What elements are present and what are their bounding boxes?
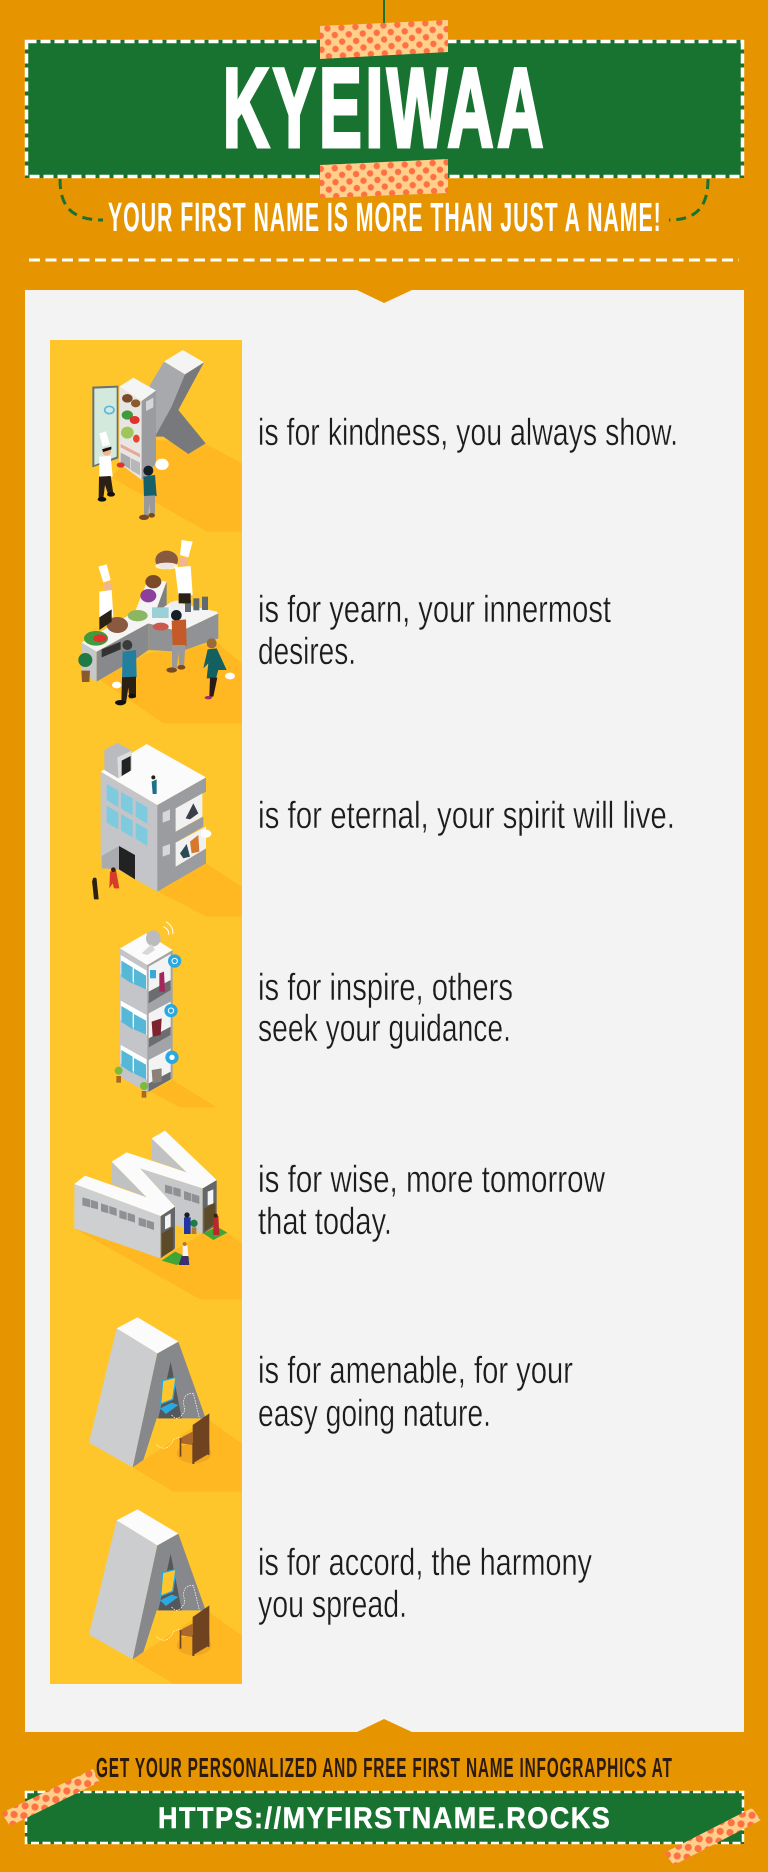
yellow illustration column <box>50 340 242 1684</box>
text: W: is for wise, more tomorrow <box>258 1159 605 1201</box>
text: Y: desires. <box>258 631 356 673</box>
illustration: letter E building <box>92 743 242 917</box>
tape: top <box>320 20 448 59</box>
footer call to action: GET YOUR PERSONALIZED AND FREE FIRST NAME INFOGRAPHICS AT <box>96 1752 672 1783</box>
main white panel <box>25 290 744 1732</box>
text: I: is for inspire, others <box>258 967 513 1009</box>
text: Y <box>258 589 611 673</box>
illustration: letter W <box>74 1131 242 1299</box>
hanging thread <box>383 0 385 24</box>
subtitle: YOUR FIRST NAME IS MORE THAN JUST A NAME! <box>108 193 661 240</box>
footer url: HTTPS://MYFIRSTNAME.ROCKS <box>158 1802 610 1835</box>
text: I: seek your guidance. <box>258 1008 511 1050</box>
footer banner <box>25 1791 744 1844</box>
text: A second <box>258 1542 592 1626</box>
title: name: KYEIWAA <box>223 46 543 171</box>
tape: bottom <box>320 159 448 198</box>
connector right <box>669 179 708 220</box>
illustration: letter K with fridge <box>92 350 242 532</box>
text: A second: you spread. <box>258 1584 407 1626</box>
illustration: letter I tower <box>115 922 217 1107</box>
text: A first: easy going nature. <box>258 1393 491 1435</box>
tape: footer right <box>664 1808 761 1865</box>
text: A second: is for accord, the harmony <box>258 1542 592 1584</box>
text: W <box>258 1159 605 1243</box>
text: W: that today. <box>258 1201 392 1243</box>
text: Y: is for yearn, your innermost <box>258 589 611 631</box>
connector left <box>60 179 103 220</box>
text: A first <box>258 1350 573 1435</box>
tape: footer left <box>2 1769 100 1826</box>
illustration: letter A desk second <box>89 1509 242 1684</box>
illustration: letter A desk <box>89 1317 242 1492</box>
illustration: letter Y buffet <box>78 540 242 723</box>
title banner <box>25 40 744 178</box>
text: A first: is for amenable, for your <box>258 1350 573 1392</box>
text: I <box>258 967 513 1050</box>
